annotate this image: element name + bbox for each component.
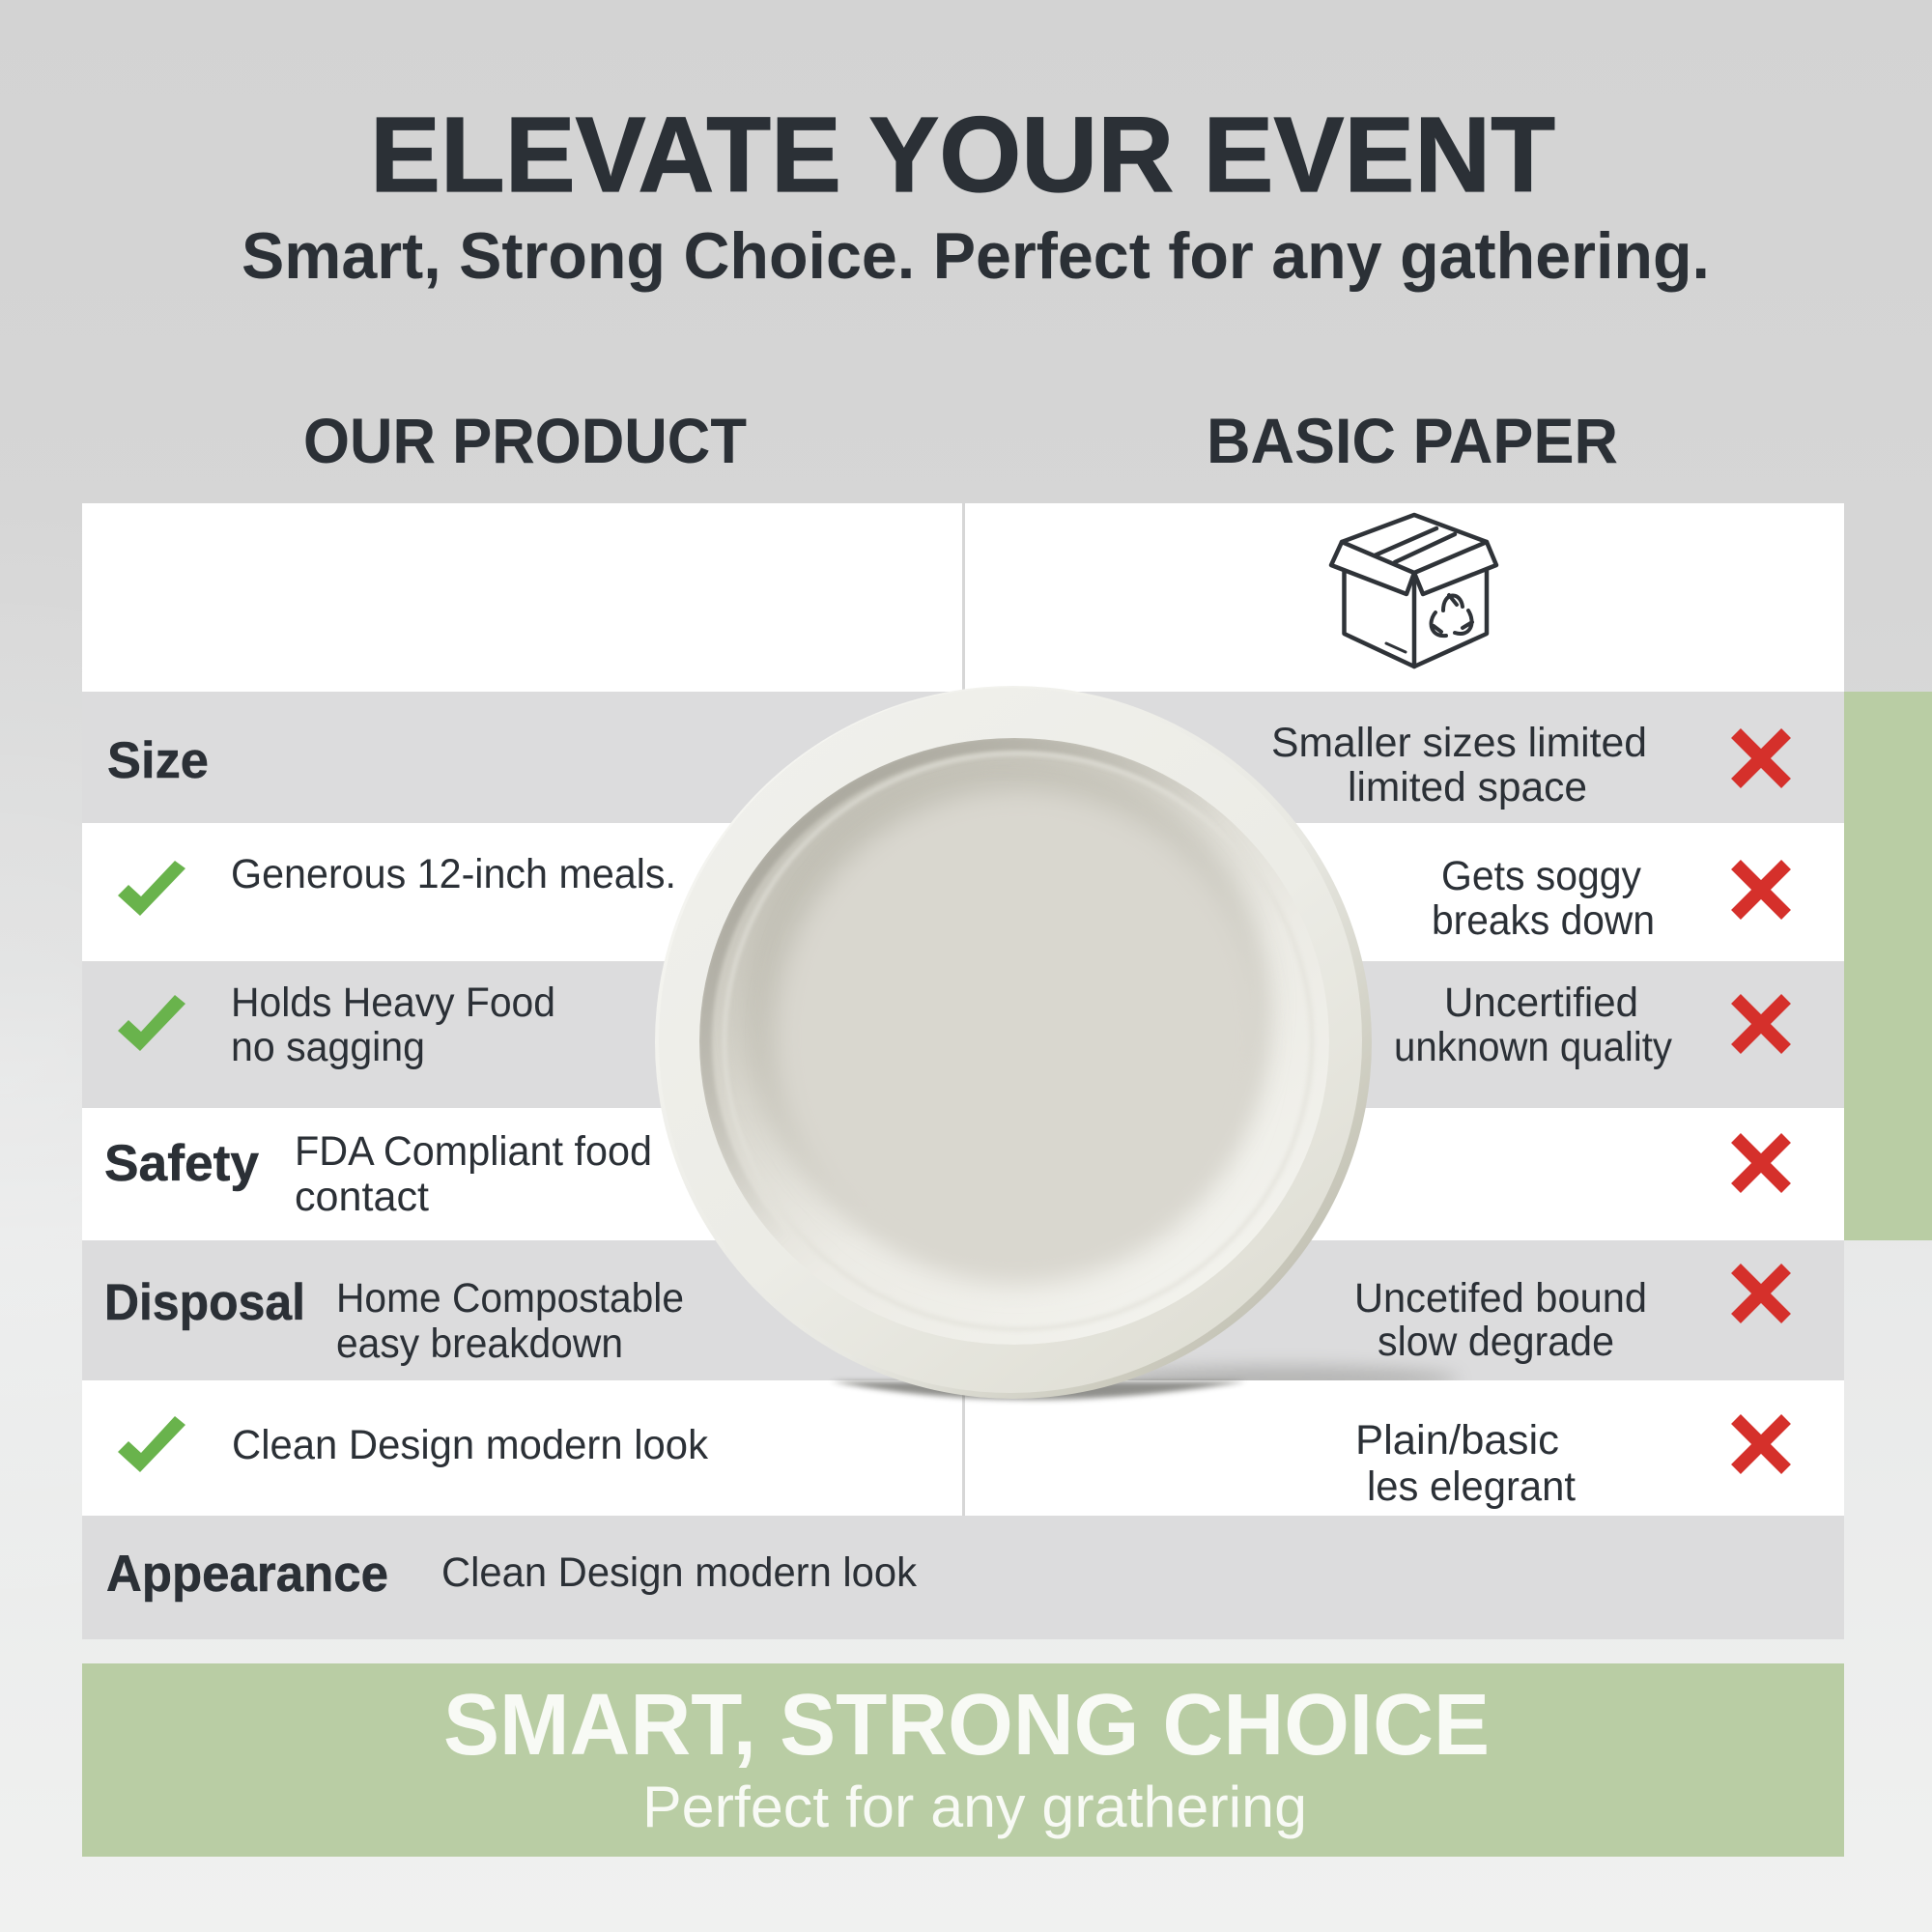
banner heading: SMART, STRONG CHOICE (443, 1677, 1490, 1774)
label: size: Size (107, 732, 209, 789)
basic paper: uncertified (1394, 980, 1672, 1070)
row: holds heavy food (118, 980, 555, 1070)
row: disposal (104, 1274, 684, 1367)
basic paper: soggy (1432, 853, 1655, 944)
row: holds heavy food: Holds Heavy Food (231, 980, 555, 1026)
basic paper: uncertified: unknown quality (1394, 1024, 1672, 1070)
row: generous size (118, 851, 676, 916)
column heading: basic paper: BASIC PAPER (1207, 405, 1618, 476)
row: clean design (118, 1416, 708, 1472)
row: clean design: Clean Design modern look (232, 1422, 708, 1468)
bottom banner (82, 1663, 1844, 1857)
icons: red crosses (1736, 733, 1786, 1469)
label: disposal: Disposal (104, 1274, 305, 1331)
basic paper: appearance (1355, 1417, 1576, 1510)
row: disposal: easy breakdown (336, 1321, 623, 1367)
column heading: our product: OUR PRODUCT (303, 405, 747, 476)
row: appearance: Clean Design modern look (441, 1549, 917, 1596)
basic paper: uncertified: Uncertified (1444, 980, 1638, 1026)
icon: green check (118, 861, 185, 916)
row: appearance (106, 1546, 917, 1603)
plate shadow (831, 1366, 1459, 1400)
side accent: green band (1844, 692, 1932, 1240)
basic paper: size: Smaller sizes limited (1271, 720, 1647, 766)
plate (655, 686, 1459, 1400)
basic paper: size (1271, 720, 1647, 810)
basic paper: degrade (1354, 1275, 1647, 1365)
basic paper: appearance: Plain/basic (1355, 1417, 1559, 1463)
row: safety: contact (295, 1174, 429, 1220)
row: disposal: Home Compostable (336, 1275, 684, 1321)
subtitle: Smart, Strong Choice. Perfect for any gathering. (242, 219, 1710, 293)
plate well (699, 738, 1329, 1345)
banner subheading: Perfect for any grathering (642, 1775, 1307, 1839)
row: holds heavy food: no sagging (231, 1024, 425, 1070)
icon: recycled cardboard box (1331, 515, 1496, 667)
label: safety: Safety (104, 1135, 260, 1192)
basic paper: degrade: slow degrade (1378, 1319, 1614, 1365)
plate rim (655, 686, 1372, 1399)
basic paper: size: limited space (1348, 764, 1587, 810)
title: ELEVATE YOUR EVENT (370, 96, 1555, 214)
row: safety (104, 1128, 652, 1220)
icon: green check (118, 995, 185, 1051)
label: appearance: Appearance (106, 1546, 388, 1603)
row: generous size: Generous 12-inch meals. (231, 851, 676, 897)
plate flat centre (775, 789, 1262, 1284)
row: safety: FDA Compliant food (295, 1128, 652, 1175)
comparison table background (82, 503, 1844, 1639)
basic paper: degrade: Uncetifed bound (1354, 1275, 1647, 1321)
basic paper: appearance: les elegrant (1367, 1463, 1576, 1510)
icon: green check (118, 1416, 185, 1472)
basic paper: soggy: Gets soggy (1441, 853, 1641, 899)
basic paper: soggy: breaks down (1432, 897, 1655, 944)
